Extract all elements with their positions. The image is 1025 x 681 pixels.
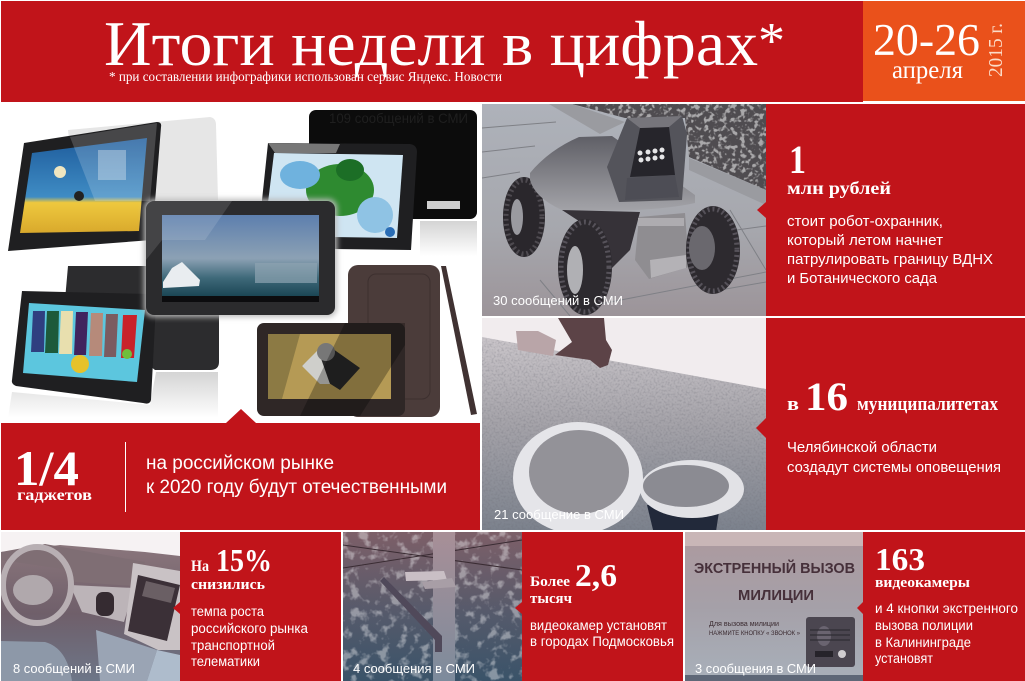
gear stick: [96, 592, 114, 616]
heading: [787, 374, 998, 419]
panel: video cameras stat: [515, 532, 683, 681]
unit: видеокамеры: [875, 575, 970, 591]
bright wall: [482, 318, 766, 389]
heading: Более: [530, 574, 570, 590]
description: который летом начнет: [787, 233, 943, 249]
heading: муниципалитетах: [857, 394, 998, 415]
description: и 4 кнопки экстренного: [875, 601, 1018, 616]
icon: black tablet back: [309, 110, 477, 219]
big number: 1: [789, 137, 806, 182]
description: [191, 604, 308, 669]
date panel: [863, 1, 1025, 101]
title: Итоги недели в цифрах: [104, 8, 758, 79]
robot head: [607, 116, 687, 202]
description: [530, 618, 674, 649]
pointer: [857, 602, 863, 614]
panel: robot photo: [482, 104, 766, 316]
sign text: Для вызова милиции: [709, 621, 779, 628]
heading: снизились: [191, 577, 265, 593]
year: 2015 г.: [985, 23, 1007, 77]
wires: [343, 540, 522, 570]
sign text: ЭКСТРЕННЫЙ ВЫЗОВ: [694, 559, 855, 577]
cameras: [405, 571, 456, 589]
worker: [555, 318, 612, 368]
robot undercarriage: [562, 210, 640, 270]
description: и Ботанического сада: [787, 271, 938, 287]
icon: tablet with colourful apps: [12, 291, 156, 404]
radio stack: [128, 575, 180, 641]
large speaker: [513, 422, 643, 534]
heading: [191, 542, 272, 593]
description: стоит робот-охранник,: [787, 214, 943, 230]
steering wheel: [3, 547, 71, 623]
description: [787, 440, 1001, 476]
bracket arm: [380, 577, 442, 652]
media count: call button: 3 сообщения в СМИ: [695, 661, 816, 676]
description: видеокамер установят: [530, 618, 667, 633]
date range: 20-26: [873, 15, 980, 65]
floor right: [147, 650, 180, 681]
paving lines: [482, 122, 766, 316]
description: в Калининграде: [875, 635, 971, 650]
heading: [530, 557, 617, 607]
heading: тысяч: [530, 591, 573, 607]
description: российского рынка: [191, 621, 308, 636]
tablet back logo: [427, 201, 460, 209]
kerb: [549, 104, 766, 205]
description: на российском рынке: [146, 453, 334, 474]
panel: speakers photo: [482, 318, 766, 538]
icon: tablet with yellow screen: [8, 122, 161, 251]
shaft: [96, 630, 157, 681]
description: к 2020 году будут отечественными: [146, 477, 447, 498]
description: [146, 453, 447, 498]
description: Челябинской области: [787, 440, 937, 456]
icon: brown tablet back: [348, 265, 477, 417]
description: патрулировать границу ВДНХ: [787, 252, 993, 268]
month: апреля: [892, 57, 963, 84]
icon: reflection lower left: [10, 372, 218, 410]
description: темпа роста: [191, 604, 264, 619]
description: телематики: [191, 654, 260, 669]
big number: 163: [875, 541, 925, 577]
small speaker: [640, 460, 744, 530]
heading: 15%: [216, 542, 272, 578]
heading: 16: [805, 374, 848, 419]
media count: camera: 4 сообщения в СМИ: [353, 661, 475, 676]
pole: [433, 532, 455, 681]
hedge: [572, 104, 766, 190]
description: установят: [875, 651, 933, 666]
panel: telematics stat: [173, 532, 341, 681]
header band: [1, 1, 863, 102]
pointer: [173, 602, 180, 614]
heading: в: [787, 394, 799, 415]
panel: gadgets stat: [1, 409, 480, 530]
sign text: [694, 559, 855, 637]
footnote: * при составлении инфографики использован сервис Яндекс. Новости: [109, 69, 502, 84]
instrument panel: [1, 544, 88, 552]
description: создадут системы оповещения: [787, 460, 1001, 476]
icon: reflection under black tablet: [420, 221, 477, 250]
panel: robot stat: [757, 104, 1025, 316]
robot body: [530, 136, 695, 211]
robot lights: [638, 148, 664, 162]
pointer: [515, 602, 522, 614]
wall top band: [685, 532, 863, 546]
icon: centre tablet: [144, 199, 337, 317]
big number: 1/4: [14, 440, 79, 496]
description: [875, 601, 1018, 666]
pointer: [756, 418, 766, 438]
description: вызова полиции: [875, 618, 973, 633]
description: транспортной: [191, 638, 275, 653]
media count: tablets: 109 сообщений в СМИ: [329, 110, 468, 126]
base strip: [685, 675, 863, 681]
paint tubs: [516, 331, 556, 356]
panel: alert systems stat: [756, 318, 1025, 530]
pointer: [757, 202, 766, 218]
unit: млн рублей: [787, 178, 891, 198]
unit: гаджетов: [17, 487, 92, 504]
media count: speakers: 21 сообщение в СМИ: [494, 507, 624, 522]
icon: white tablet back: [68, 117, 218, 200]
panel: street camera photo: [343, 532, 522, 681]
panel: tablets photo: [1, 104, 480, 423]
heading: На: [191, 558, 209, 575]
robot front wheels: [558, 206, 740, 315]
robot rear wheel: [503, 177, 545, 257]
bright windscreen: [1, 532, 180, 556]
sign text: МИЛИЦИИ: [738, 587, 814, 604]
pointer: [226, 409, 256, 423]
panel: Kaliningrad stat: [857, 532, 1025, 681]
icon: tablet with camera photo: [257, 323, 405, 416]
media count: dashboard: 8 сообщений в СМИ: [13, 661, 135, 676]
icon: dark tablet back lower left: [65, 266, 219, 370]
console frame: [124, 563, 180, 650]
intercom: [806, 617, 855, 667]
heading: 2,6: [575, 557, 617, 593]
seat: [1, 641, 72, 681]
media count: robot: 30 сообщений в СМИ: [493, 293, 623, 308]
icon: game tablet: [257, 143, 417, 250]
title asterisk: *: [758, 13, 785, 70]
robot front fascia: [635, 213, 689, 279]
panel: emergency call photo: [685, 532, 863, 681]
sign text: НАЖМИТЕ КНОПКУ « ЗВОНОК »: [709, 631, 801, 637]
centre panel: [74, 585, 130, 622]
panel: dashboard photo: [1, 532, 180, 681]
description: в городах Подмосковья: [530, 634, 674, 649]
description: [787, 214, 993, 287]
